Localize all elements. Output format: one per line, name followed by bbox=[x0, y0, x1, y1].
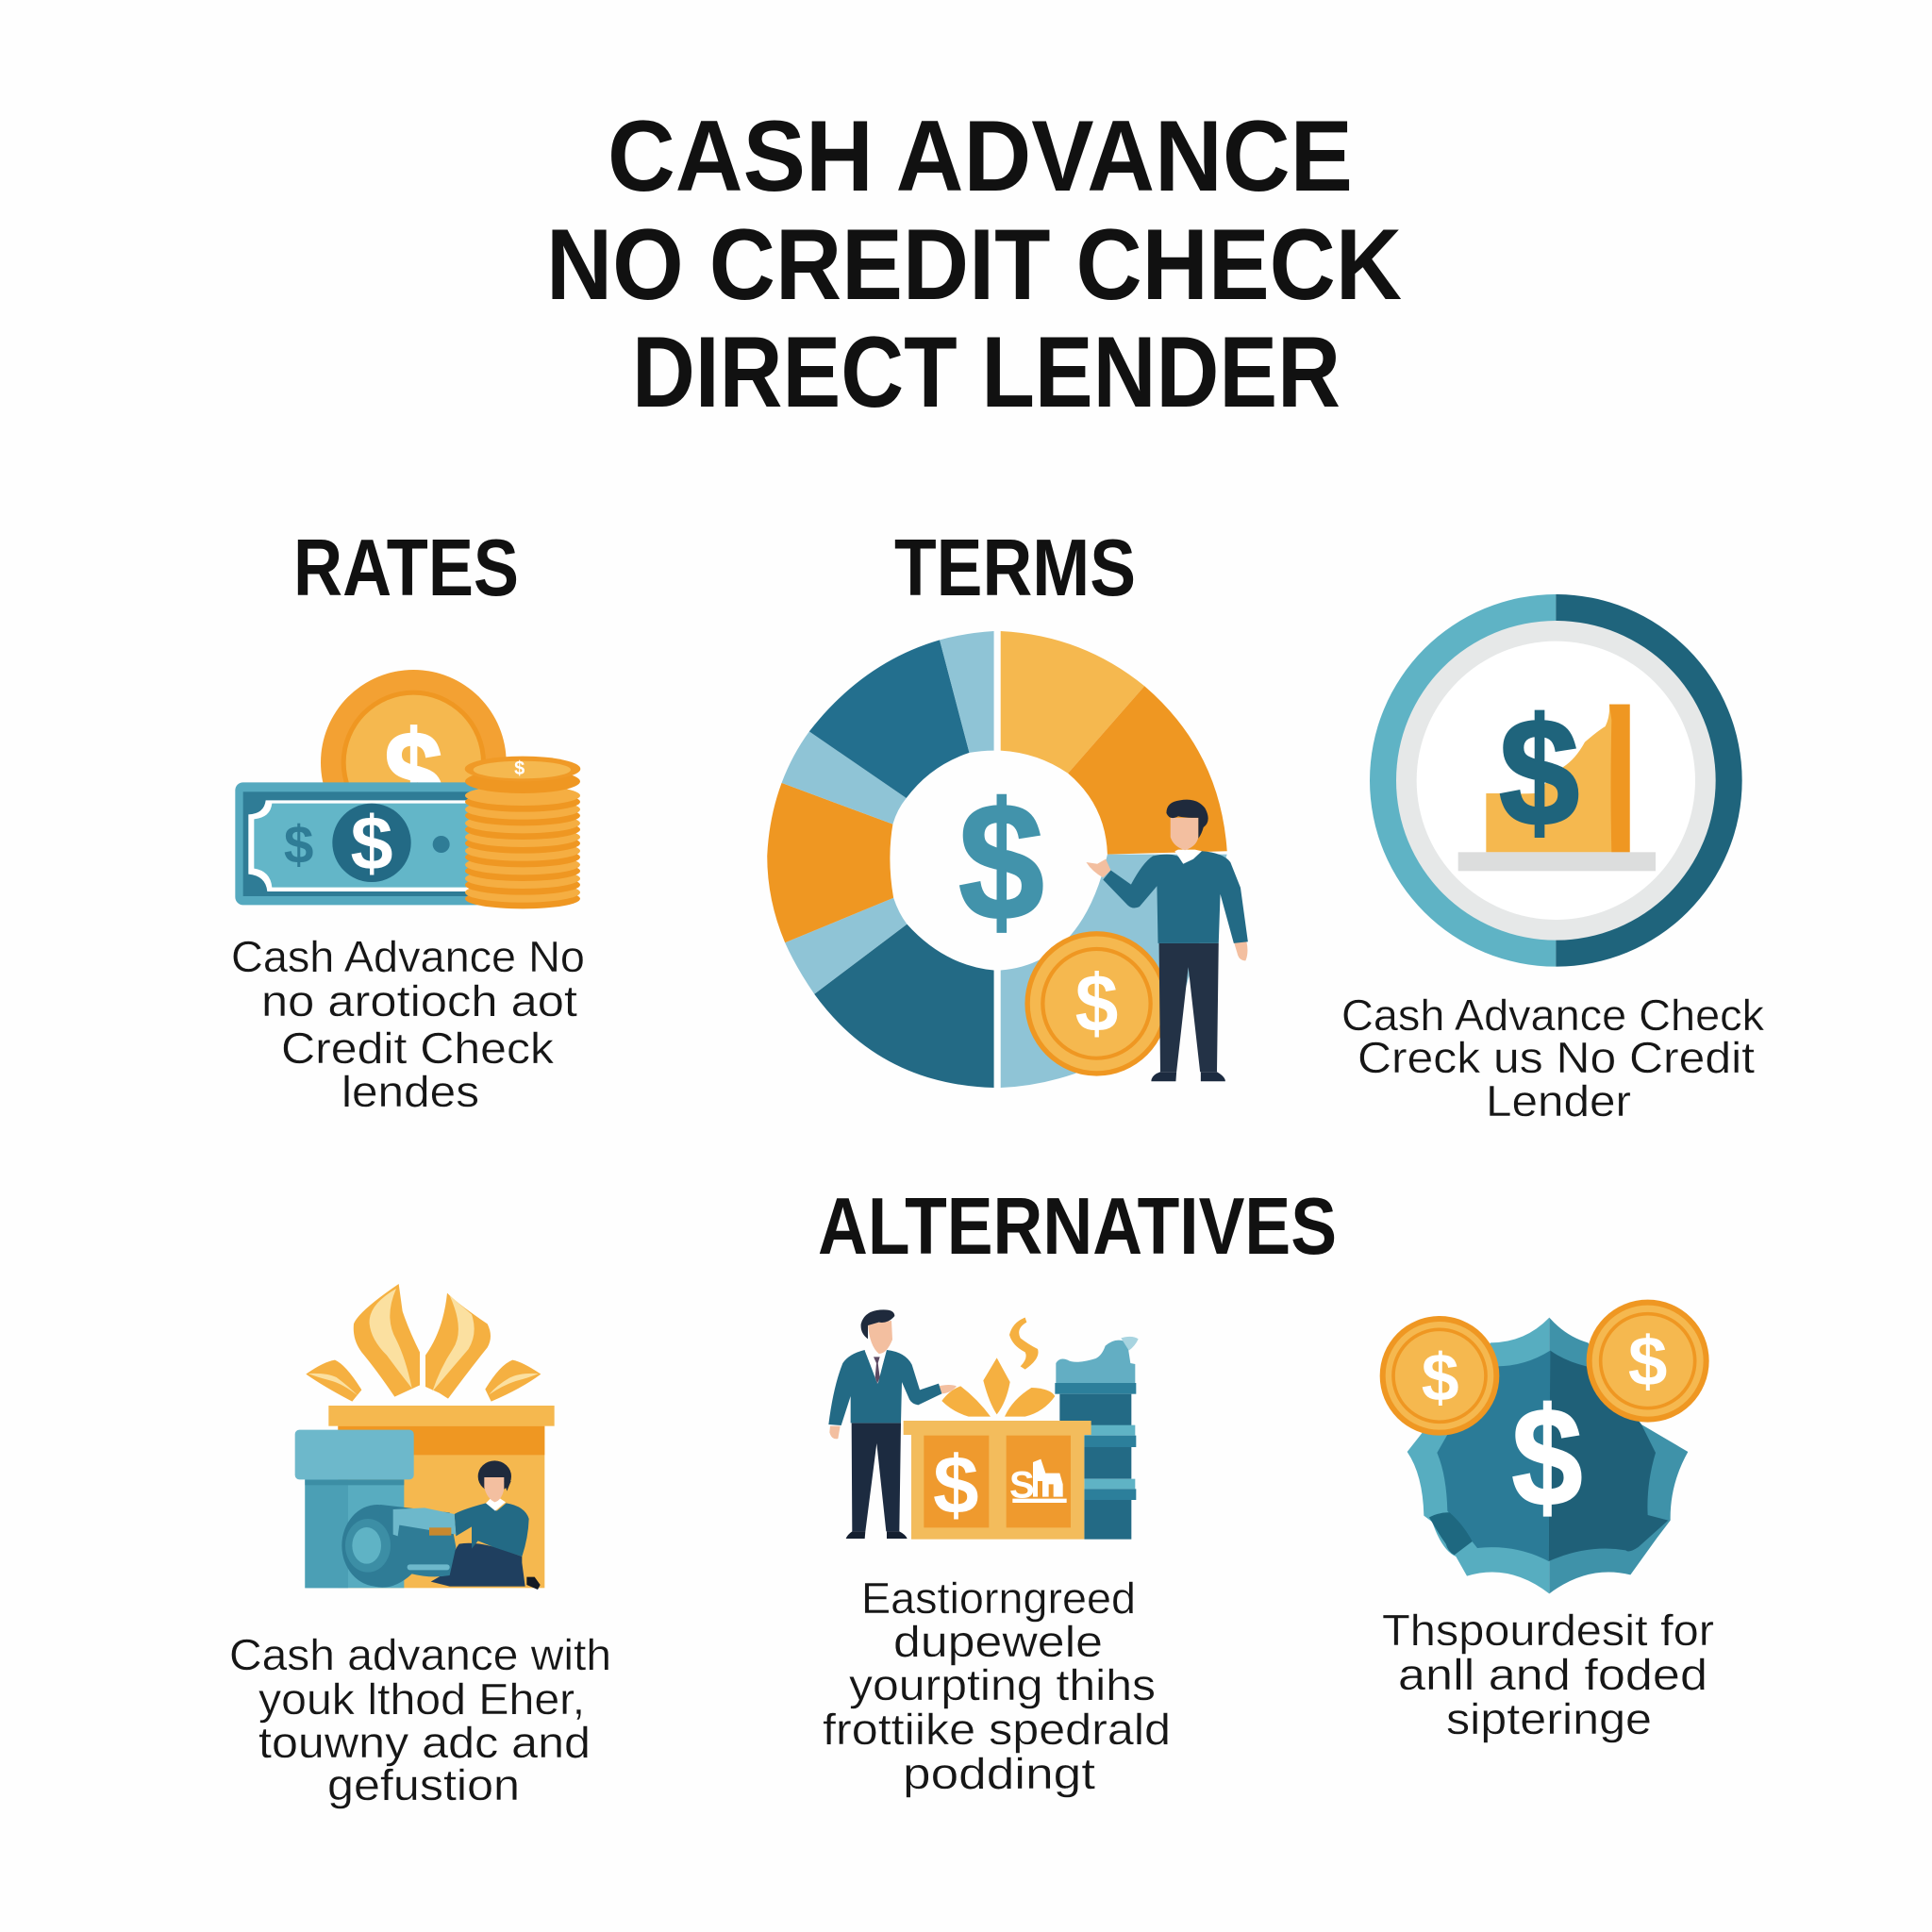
ring bbox=[1370, 594, 1742, 967]
text: center alternative caption: poddingt bbox=[903, 1749, 1095, 1798]
coin left: $ bbox=[1422, 1340, 1459, 1415]
barrels bbox=[1055, 1337, 1139, 1540]
ribbons bbox=[306, 1284, 541, 1402]
coin stack: $ bbox=[514, 758, 525, 779]
bow bbox=[941, 1318, 1055, 1417]
text: center alternative caption bbox=[823, 1574, 1171, 1798]
bill: $ bbox=[350, 802, 393, 887]
text: rates caption bbox=[231, 932, 585, 1116]
coin right bbox=[1587, 1300, 1709, 1423]
heading: terms: TERMS bbox=[894, 524, 1136, 613]
title: DIRECT LENDER bbox=[632, 315, 1341, 428]
text: left alternative caption bbox=[229, 1630, 611, 1809]
icon: man with gift box and barrels bbox=[828, 1309, 1139, 1540]
text: center alternative caption: dupewele bbox=[893, 1617, 1103, 1666]
text: right alternative caption: sipteringe bbox=[1446, 1694, 1652, 1743]
text: rates caption: Credit Check bbox=[281, 1024, 555, 1073]
coin right: $ bbox=[1628, 1322, 1667, 1401]
heading: rates: RATES bbox=[293, 524, 519, 613]
text: terms caption bbox=[1341, 991, 1765, 1125]
text: rates caption: lendes bbox=[341, 1067, 479, 1116]
icon: shield with coins bbox=[1380, 1300, 1709, 1593]
box bbox=[328, 1406, 555, 1588]
text: terms caption: Creck us No Credit bbox=[1357, 1033, 1755, 1082]
text: left alternative caption: youk lthod Eher, bbox=[258, 1674, 585, 1724]
text: center alternative caption: yourpting thihs bbox=[849, 1660, 1156, 1709]
heading: alternatives: ALTERNATIVES bbox=[818, 1182, 1337, 1272]
donut segments bbox=[767, 631, 1227, 1088]
text: center alternative caption: frottiike spedrald bbox=[823, 1705, 1171, 1754]
coin bbox=[1024, 931, 1169, 1076]
coin left bbox=[1380, 1316, 1499, 1436]
icon: cash bill, coin and coin stack bbox=[235, 670, 580, 908]
dollar sign: $ bbox=[1499, 688, 1579, 858]
text: terms caption: Lender bbox=[1486, 1076, 1631, 1125]
shield: $ bbox=[1511, 1380, 1582, 1536]
title bbox=[546, 99, 1402, 428]
shield bbox=[1407, 1318, 1688, 1593]
gift box: S bbox=[1009, 1464, 1035, 1506]
big coin bbox=[321, 670, 507, 856]
gift box bbox=[904, 1421, 1091, 1540]
man bbox=[828, 1309, 957, 1539]
big coin: $ bbox=[384, 706, 443, 843]
seated person bbox=[431, 1460, 541, 1590]
gift box: $ bbox=[933, 1439, 979, 1531]
text: left alternative caption: gefustion bbox=[327, 1760, 520, 1809]
rising chart bbox=[1458, 705, 1656, 871]
coin: $ bbox=[1075, 958, 1118, 1049]
text: left alternative caption: Cash advance wіth bbox=[229, 1630, 611, 1679]
text: left alternative caption: touwny adc and bbox=[258, 1718, 591, 1767]
text: terms caption: Cash Advance Check bbox=[1341, 991, 1765, 1040]
text: center alternative caption: Eastiorngreed bbox=[861, 1574, 1136, 1623]
icon: ring with dollar and chart bbox=[1370, 594, 1742, 967]
title: CASH ADVANCE bbox=[608, 99, 1353, 212]
bill: $ bbox=[284, 816, 313, 875]
chart: donut with dollar, coin and man bbox=[767, 631, 1248, 1088]
text: right alternative caption: Thspourdesit for bbox=[1382, 1606, 1714, 1655]
text: rates caption: Cash Advance No bbox=[231, 932, 585, 981]
bill bbox=[235, 782, 484, 905]
center dollar sign: $ bbox=[958, 768, 1044, 955]
text: right alternative caption bbox=[1382, 1606, 1714, 1743]
text: right alternative caption: anll and foded bbox=[1398, 1650, 1707, 1699]
machine bbox=[341, 1505, 456, 1588]
man bbox=[1086, 800, 1248, 1081]
title: NO CREDIT CHECK bbox=[546, 208, 1402, 321]
teal column bbox=[295, 1430, 414, 1588]
text: rates caption: no arotioch aot bbox=[261, 976, 577, 1025]
icon: gift box with seated person bbox=[295, 1284, 555, 1590]
coin stack bbox=[465, 757, 580, 908]
